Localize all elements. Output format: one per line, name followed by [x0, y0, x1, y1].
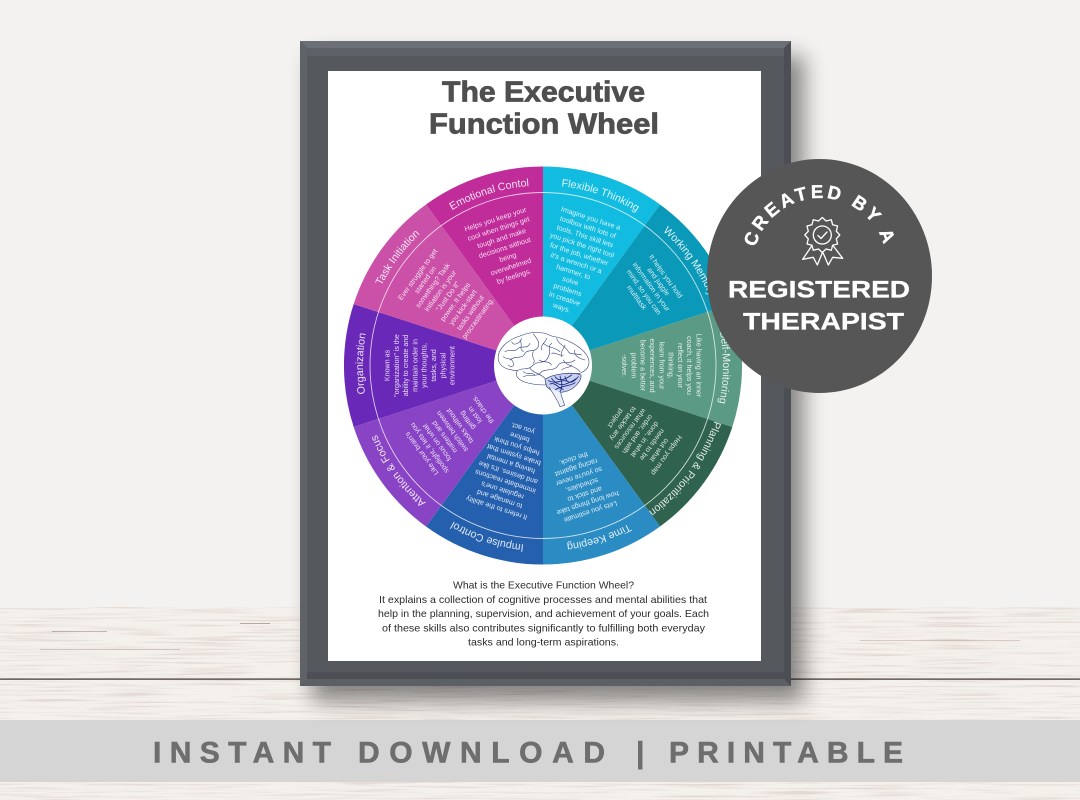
bottom banner — [0, 720, 1080, 782]
banner text: | — [636, 736, 644, 770]
sector: Task Initiation: tasks without — [455, 294, 486, 332]
title: Function Wheel — [429, 108, 659, 140]
banner text — [153, 736, 903, 770]
sector: Time Keeping: Time Keeping — [567, 525, 632, 550]
sector: Organization — [344, 304, 496, 427]
sector: Emotional Contol: decisions without — [478, 236, 532, 260]
inner ring line — [370, 192, 716, 538]
sector: Organization: "organization" is the — [393, 334, 401, 397]
icon: award rosette — [803, 218, 843, 265]
sector: Self-Monitoring: problem — [629, 353, 637, 378]
title: The Executive — [442, 76, 645, 108]
background wall — [0, 0, 1080, 608]
sector: Impulse Control: It refers to the ability — [465, 494, 528, 521]
sector: Time Keeping: and stick to — [566, 484, 603, 503]
sector: Task Initiation: "Just Do It" — [435, 280, 462, 313]
sector: Impulse Control: you act. — [510, 420, 536, 436]
sector: Attention & Focus: focus on what — [421, 422, 453, 462]
sector: Impulse Control: before — [509, 430, 531, 444]
sector: Impulse Control: to manage and — [476, 488, 523, 510]
sector: Time Keeping: so you're never — [554, 465, 603, 488]
sector: Self-Monitoring: become a better — [639, 340, 647, 392]
sector: Organization: Known as — [384, 349, 392, 381]
frame shadow — [312, 56, 804, 701]
sector: Working Memory: information in your — [631, 261, 672, 314]
wooden floor — [0, 607, 1080, 800]
sector: Working Memory: Working Memory — [664, 226, 708, 294]
sector: Planning & Prioritization: done, in what — [629, 420, 660, 459]
sector: Flexible Thinking — [543, 166, 660, 326]
sector: Flexible Thinking: Flexible Thinking — [562, 179, 639, 212]
sector: Attention & Focus: spotlight, it lets you — [409, 421, 451, 475]
sector: Self-Monitoring: learn from your — [657, 342, 665, 390]
sector: Planning & Prioritization: to tackle any — [607, 405, 638, 442]
sector: Planning & Prioritization: out what — [648, 437, 670, 463]
sector: Flexible Thinking: hammer, to — [555, 263, 591, 282]
badge heading: THERAPIST — [743, 308, 904, 336]
sector: Time Keeping — [543, 405, 660, 564]
sector: Attention & Focus: Attention & Focus — [372, 435, 426, 506]
sector: Impulse Control: brake system that — [486, 442, 542, 467]
banner text: PRINTABLE — [669, 736, 903, 770]
sector: Impulse Control: having a mental — [486, 452, 536, 475]
bottom description text: of these skills also contributes significantly to fulfilling both everyday — [382, 623, 706, 634]
sector: Emotional Contol: Helps you keep your — [464, 206, 528, 233]
executive function wheel — [344, 166, 742, 564]
bottom description text: help in the planning, supervision, and achievement of your goals. Each — [378, 609, 709, 620]
poster sheet — [328, 71, 761, 661]
sector: Self-Monitoring: reflect on your — [676, 343, 684, 389]
center hub — [494, 316, 592, 414]
sector: Attention & Focus: the chaos. — [470, 394, 496, 425]
sector: Time Keeping: schedules, — [564, 476, 599, 494]
sector: Task Initiation: power. It helps — [439, 281, 473, 323]
badge heading — [728, 276, 910, 336]
bottom description text — [378, 580, 709, 648]
sector: Self-Monitoring: -solver. — [620, 354, 628, 377]
sector: Task Initiation: started on — [413, 265, 438, 295]
sector: Working Memory: mind, so you can — [625, 268, 663, 316]
sector: Time Keeping: how long things take — [556, 489, 620, 516]
sector: Task Initiation: procrastinating. — [461, 296, 496, 340]
banner text: DOWNLOAD — [358, 736, 605, 770]
bottom description text: tasks and long-term aspirations. — [468, 638, 619, 648]
sector: Attention & Focus: getting — [458, 409, 477, 431]
sector: Attention & Focus: Like your brain's — [403, 430, 440, 477]
sector: Working Memory — [572, 204, 712, 350]
sector: Planning & Prioritization: Planning & Prioritization — [649, 422, 721, 515]
sector: Self-Monitoring: thinking, — [667, 352, 675, 379]
sector: Emotional Contol: overwhelmed — [490, 257, 532, 277]
sector: Attention & Focus: lost in — [467, 405, 484, 425]
sector: Flexible Thinking: it's a wrench or a — [550, 251, 603, 275]
sector: Emotional Contol — [426, 166, 543, 326]
sector: Organization: physical — [439, 352, 447, 378]
sector: Attention & Focus: tasks without — [445, 407, 475, 445]
sector: Organization: your thoughts, — [421, 343, 429, 388]
sector: Impulse Control: and desires. it's like — [478, 459, 539, 486]
sector: Planning & Prioritization: order, and with — [620, 413, 654, 455]
badge heading: REGISTERED — [728, 276, 910, 304]
picture frame — [300, 41, 791, 686]
icon: brain — [498, 332, 589, 407]
sector: Task Initiation: you kick-start — [448, 288, 479, 327]
sector: Impulse Control: regulate one's — [480, 479, 525, 501]
sector: Task Initiation: initiation is your — [423, 268, 459, 313]
sector: Organization: maintain order in — [411, 339, 419, 392]
sector: Flexible Thinking: in creative — [548, 290, 581, 308]
bottom description text: It explains a collection of cognitive processes and mental abilities that — [379, 595, 707, 606]
sector: Attention & Focus — [354, 380, 514, 526]
sector: Time Keeping: the clock. — [558, 450, 589, 467]
sector: Organization: tasks, and — [430, 349, 438, 382]
sector: Working Memory: It helps you hold — [647, 253, 684, 300]
sector: Task Initiation: something? Task — [414, 261, 452, 309]
sector: Flexible Thinking: you pick the right tool — [549, 231, 616, 260]
sector: Emotional Contol: Emotional Contol — [449, 178, 528, 210]
badge: created by a registered therapist — [707, 159, 932, 393]
sector: Flexible Thinking: problems — [552, 282, 583, 299]
sector: Planning & Prioritization: what resources — [612, 406, 648, 451]
sector: Self-Monitoring: Self-Monitoring — [717, 332, 731, 404]
sector: Working Memory: and juggle — [645, 266, 671, 297]
sector: Self-Monitoring: coach, it helps you — [685, 336, 693, 395]
sector: Self-Monitoring — [590, 310, 742, 427]
sector: Task Initiation: Ever struggle to get — [397, 247, 439, 302]
bottom description text: What is the Executive Function Wheel? — [453, 580, 634, 592]
sector: Emotional Contol: being — [498, 251, 517, 264]
sector: Task Initiation — [354, 204, 514, 350]
sector: Attention & Focus: matters and — [431, 419, 459, 454]
sector: Flexible Thinking: for the job, whether — [549, 241, 610, 268]
sector: Time Keeping: Lets you estimate — [563, 499, 618, 524]
badge arc text: CREATED BY A — [744, 185, 894, 246]
sector: Impulse Control: Impulse Control — [450, 522, 523, 552]
sector: Impulse Control — [426, 405, 543, 564]
title — [429, 76, 659, 140]
sector: Flexible Thinking: solve — [561, 275, 580, 288]
sector: Planning & Prioritization: Helps you map — [649, 434, 684, 477]
sector: Impulse Control: helps you think — [493, 435, 541, 457]
sector: Emotional Contol: by feelings. — [496, 267, 532, 286]
sector: Flexible Thinking: Imagine you have a — [560, 205, 621, 232]
sector: Self-Monitoring: Like having an inner — [694, 334, 702, 398]
sector: Organization: ability to create and — [402, 335, 410, 396]
sector: Self-Monitoring: experiences, and — [648, 338, 656, 393]
sector: Attention & Focus: switch between — [435, 409, 470, 453]
sector: Organization: environment — [449, 346, 457, 385]
sector: Planning & Prioritization — [572, 380, 732, 526]
banner text: INSTANT — [153, 736, 331, 770]
sector: Emotional Contol: tough and make — [476, 227, 527, 250]
sector: Organization: Organization — [355, 333, 366, 394]
sector: Planning & Prioritization: needs to be — [638, 427, 666, 462]
sector: Flexible Thinking: toolbox with lots of — [559, 215, 617, 240]
sector: Flexible Thinking: tools. This skill lets — [556, 224, 615, 249]
sector: Time Keeping: racing against — [554, 457, 598, 478]
sector: Planning & Prioritization: project — [606, 407, 625, 429]
sector: Impulse Control: immediate reactions — [474, 467, 537, 495]
sector: Flexible Thinking: ways. — [551, 301, 572, 315]
sector: Emotional Contol: cool when things get — [467, 215, 531, 243]
sector: Task Initiation: Task Initiation — [375, 231, 420, 284]
sector: Working Memory: multitask — [625, 284, 648, 312]
